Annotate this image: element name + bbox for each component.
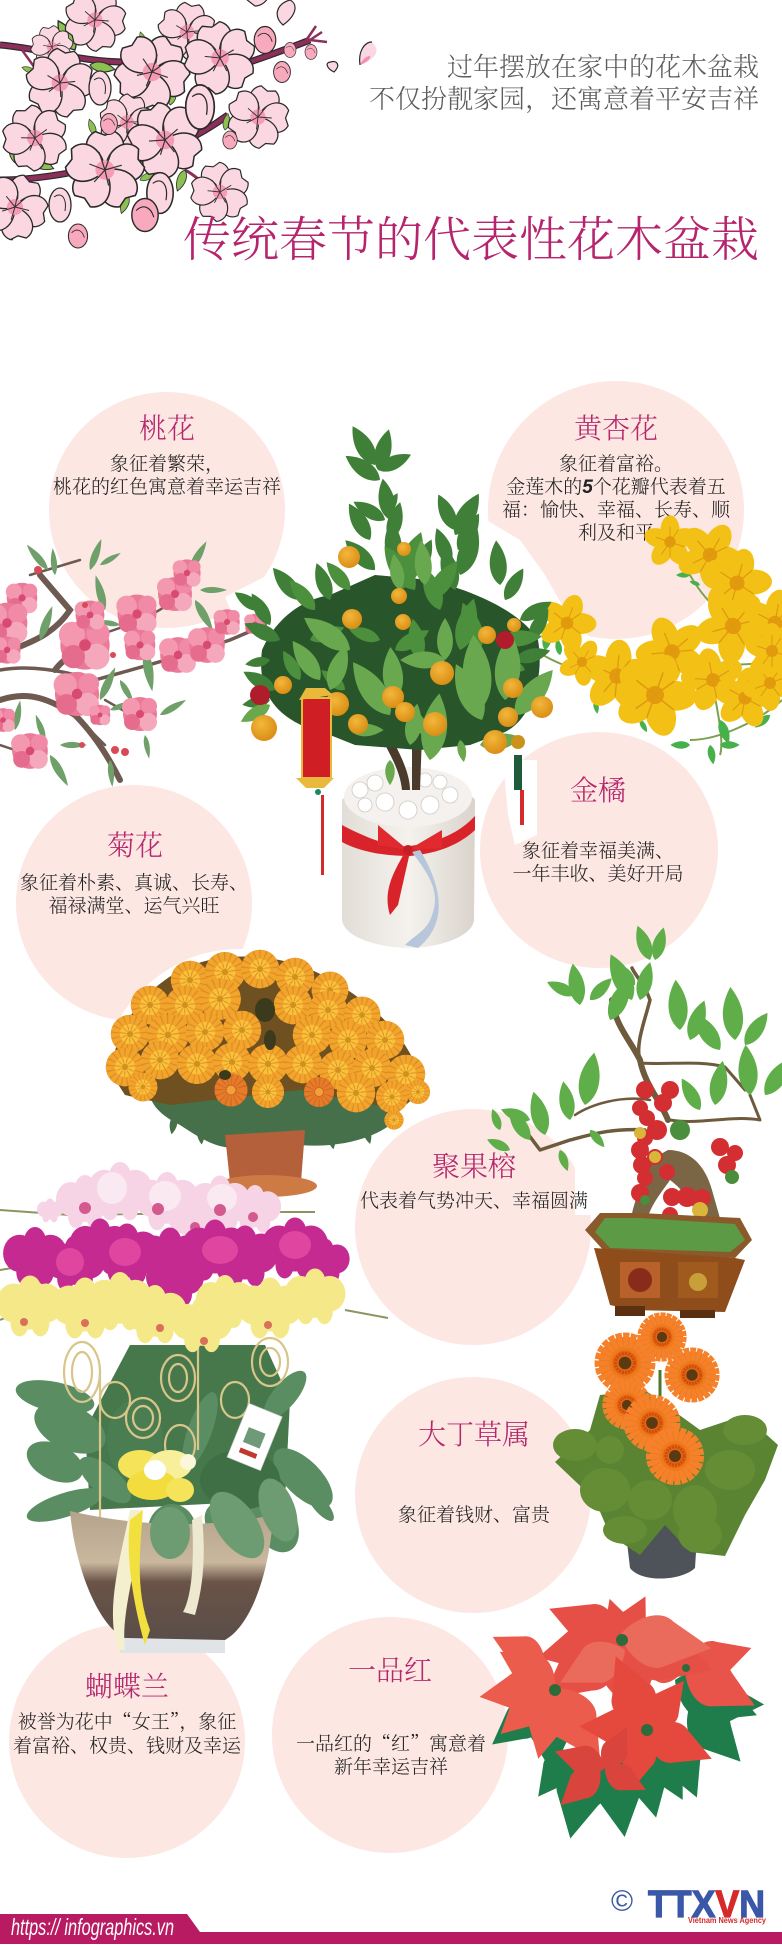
orchid pink row bbox=[37, 1162, 281, 1244]
text: kumquat: 象征着幸福美满、 bbox=[522, 836, 674, 863]
gerbera pot bbox=[625, 1520, 698, 1578]
text block: intro: 过年摆放在家中的花木盆栽 bbox=[447, 47, 759, 84]
chrysanthemum pot bbox=[215, 1130, 317, 1197]
photo: orchid basket bbox=[0, 1162, 388, 1653]
footer bar bbox=[0, 1914, 782, 1944]
ceramic pot bbox=[70, 1511, 273, 1640]
text block: intro: 不仅扮靓家园，还寓意着平安吉祥 bbox=[369, 79, 759, 116]
gold rings bbox=[64, 1338, 288, 1560]
panel: orchid circle bbox=[9, 1624, 245, 1858]
panel: gerbera circle bbox=[355, 1377, 591, 1613]
orchid leaves and stems bbox=[13, 1345, 343, 1569]
text: chrysanthemum: 福禄满堂、运气兴旺 bbox=[48, 891, 220, 918]
panel: kumquat circle bbox=[480, 732, 718, 968]
kumquat pot bbox=[342, 767, 475, 948]
orchid base bbox=[120, 1628, 225, 1653]
ribbon and bow bbox=[113, 1450, 204, 1650]
text: orchid bbox=[13, 1665, 241, 1758]
text block: intro bbox=[369, 47, 759, 116]
logo: TTXVN: TTXVN bbox=[648, 1884, 765, 1926]
text: yellow apricot bbox=[502, 407, 731, 545]
text: chrysanthemum: 菊花 bbox=[107, 824, 163, 864]
bonsai hexagonal pot bbox=[585, 1213, 752, 1318]
text: yellow apricot: 利及和平 bbox=[578, 518, 654, 545]
text: peach blossom: 桃花的红色寓意着幸运吉祥 bbox=[53, 472, 281, 499]
text: ficus: 聚果榕 bbox=[432, 1145, 516, 1185]
orchid magenta row bbox=[3, 1218, 350, 1306]
logo: TTXVN: Vietnam News Agency bbox=[688, 1916, 767, 1925]
text: orchid: 着富裕、权贵、钱财及幸运 bbox=[13, 1731, 241, 1758]
text: yellow apricot: 黄杏花 bbox=[574, 407, 658, 447]
text: ficus: 代表着气势冲天、幸福圆满 bbox=[360, 1186, 588, 1213]
text: poinsettia bbox=[296, 1649, 486, 1779]
footer url: https:// infographics.vn bbox=[11, 1914, 174, 1940]
text: ficus bbox=[360, 1145, 588, 1213]
coin and green tassel bbox=[511, 735, 525, 825]
text: poinsettia: 一品红的“红”寓意着 bbox=[296, 1729, 486, 1756]
text: poinsettia: 新年幸运吉祥 bbox=[334, 1752, 448, 1779]
photo: gerbera bbox=[553, 1316, 778, 1578]
text: yellow apricot: 福：愉快、幸福、长寿、顺 bbox=[502, 495, 731, 522]
panel: poinsettia circle bbox=[272, 1617, 508, 1853]
panel: apricot circle bbox=[488, 381, 744, 639]
front leaves bbox=[150, 1473, 305, 1568]
text: yellow apricot: 金莲木的5个花瓣代表着五 bbox=[506, 472, 726, 499]
logo: copyright mark: © bbox=[611, 1885, 633, 1918]
orchid stems bbox=[0, 1210, 388, 1320]
text: chrysanthemum: 象征着朴素、真诚、长寿、 bbox=[20, 868, 248, 895]
text: yellow apricot: 象征着富裕。 bbox=[559, 449, 673, 476]
text: peach blossom: 桃花 bbox=[139, 407, 195, 447]
text: poinsettia: 一品红 bbox=[348, 1649, 432, 1689]
panel: chrysanthemum circle bbox=[16, 785, 252, 1021]
text: gerbera: 象征着钱财、富贵 bbox=[398, 1500, 551, 1527]
photo: ficus bonsai bbox=[485, 923, 782, 1318]
text: kumquat bbox=[512, 769, 684, 886]
photo: kumquat tree bbox=[231, 422, 561, 948]
red couplet tag bbox=[296, 688, 334, 875]
panel: ficus circle bbox=[355, 1109, 591, 1345]
text: chrysanthemum bbox=[20, 824, 248, 918]
card bbox=[227, 1403, 282, 1471]
text: gerbera bbox=[398, 1413, 551, 1527]
text: orchid: 被誉为花中“女王”，象征 bbox=[18, 1707, 236, 1734]
photo: poinsettia bbox=[478, 1586, 767, 1844]
text: orchid: 蝴蝶兰 bbox=[85, 1665, 169, 1705]
text: peach blossom bbox=[53, 407, 281, 499]
text: kumquat: 金橘 bbox=[570, 769, 626, 809]
text: gerbera: 大丁草属 bbox=[418, 1413, 530, 1453]
orchid yellow row bbox=[0, 1268, 345, 1352]
photo: yellow apricot branch bbox=[517, 508, 782, 765]
photo: peach branch bbox=[0, 538, 265, 788]
text: kumquat: 一年丰收、美好开局 bbox=[512, 859, 684, 886]
photo: chrysanthemum bbox=[100, 949, 430, 1197]
title: 传统春节的代表性花木盆栽 bbox=[183, 201, 759, 270]
panel: peach circle bbox=[49, 392, 285, 628]
illustration: cherry blossom branches bbox=[0, 0, 376, 255]
text: peach blossom: 象征着繁荣， bbox=[110, 449, 224, 476]
